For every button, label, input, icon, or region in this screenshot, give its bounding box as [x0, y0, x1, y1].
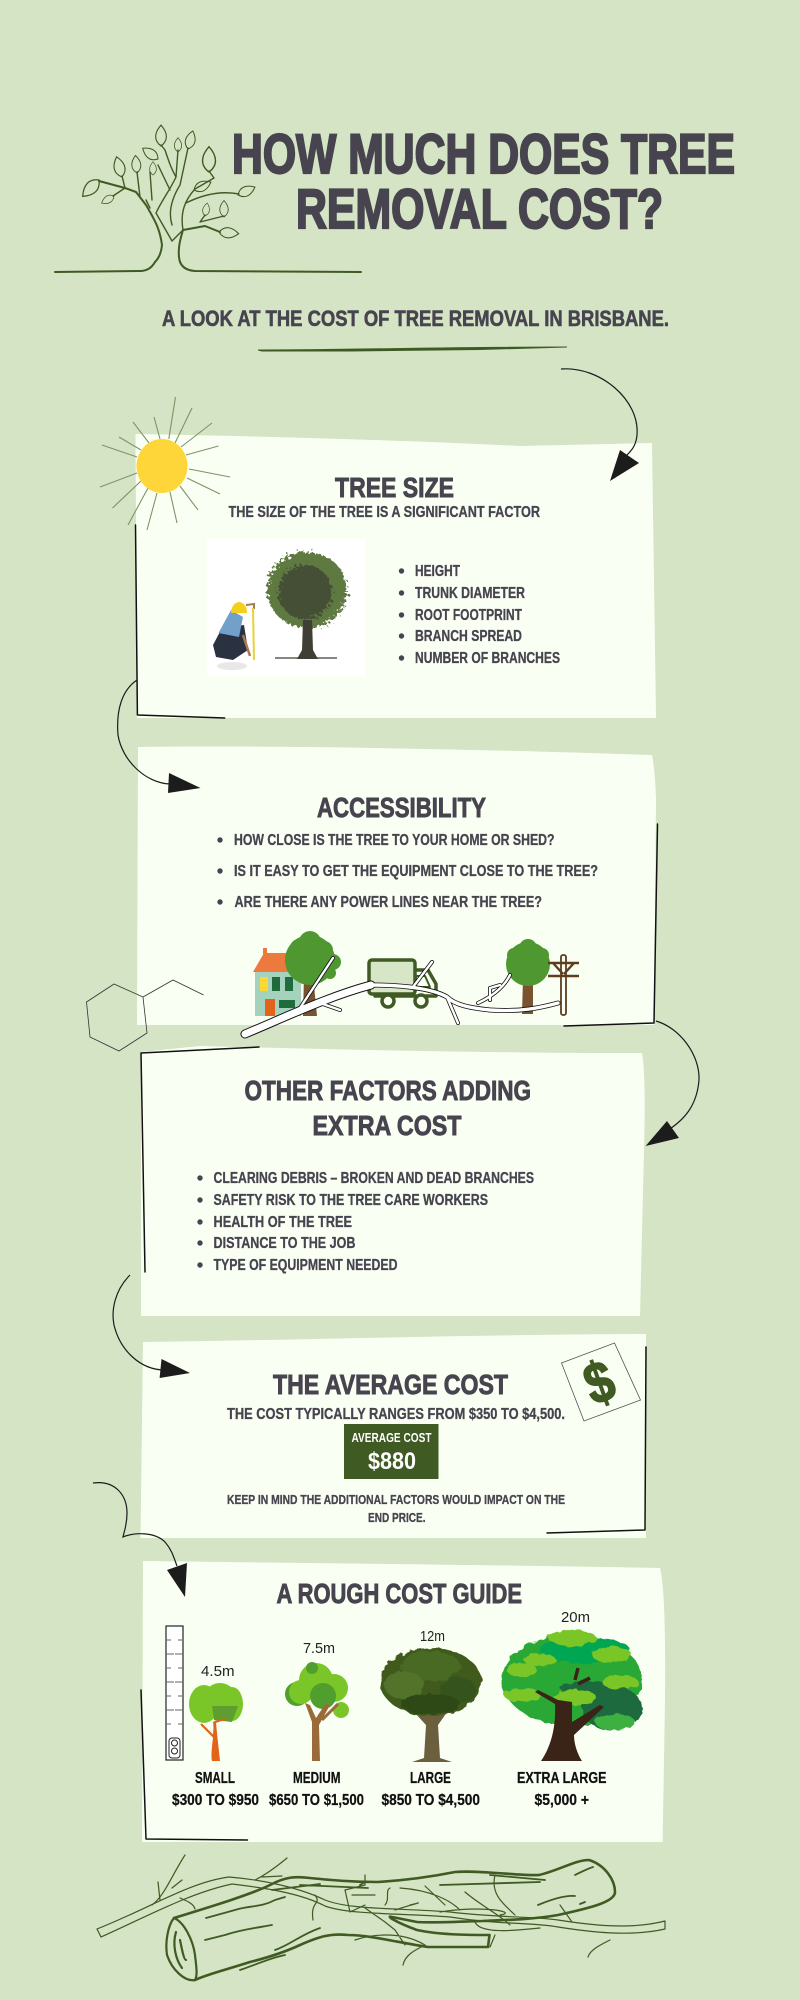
- panel background: [142, 1561, 665, 1842]
- icon: measuring ruler: [166, 1626, 183, 1760]
- average cost badge: AVERAGE COST: [352, 1431, 432, 1445]
- icon: molecule outline: [86, 980, 204, 1051]
- bullet list: ROOT FOOTPRINT: [415, 607, 522, 624]
- heading: other factors: OTHER FACTORS ADDING: [244, 1075, 531, 1106]
- size and price labels: $5,000 +: [534, 1792, 589, 1809]
- tree: medium: [285, 1662, 349, 1761]
- question list: IS IT EASY TO GET THE EQUIPMENT CLOSE TO THE TREE?: [234, 863, 598, 880]
- bullet list: NUMBER OF BRANCHES: [415, 650, 560, 667]
- height labels: 4.5m: [201, 1663, 234, 1680]
- bullet list: HEIGHT: [415, 563, 460, 580]
- panel background: [136, 434, 656, 718]
- arrow: title to tree size: [561, 369, 639, 481]
- icon: dollar tile: $: [575, 1348, 623, 1418]
- heading: tree size: TREE SIZE: [335, 472, 454, 503]
- cost range text: THE COST TYPICALLY RANGES FROM $350 TO $4,500.: [227, 1406, 565, 1423]
- panel background: [140, 1334, 646, 1538]
- question list: HOW CLOSE IS THE TREE TO YOUR HOME OR SHED?: [234, 832, 554, 849]
- arrow: tree size to accessibility: [118, 680, 200, 793]
- factors list: SAFETY RISK TO THE TREE CARE WORKERS: [214, 1192, 488, 1209]
- panel: accessibility: [137, 747, 656, 1034]
- size and price labels: MEDIUM: [293, 1770, 340, 1787]
- heading: average cost: THE AVERAGE COST: [273, 1369, 508, 1400]
- size and price labels: $300 TO $950: [172, 1792, 259, 1809]
- heading: rough cost guide: A ROUGH COST GUIDE: [276, 1578, 522, 1609]
- size and price labels: [172, 1770, 606, 1809]
- factors list: [197, 1170, 534, 1274]
- bullet list: TRUNK DIAMETER: [415, 585, 525, 602]
- tree: small: [189, 1683, 243, 1761]
- factors list: DISTANCE TO THE JOB: [214, 1235, 356, 1252]
- icon: dollar tile: [562, 1343, 640, 1421]
- illustration: fallen branches: [245, 958, 558, 1034]
- height labels: 12m: [420, 1628, 445, 1645]
- size and price labels: $850 TO $4,500: [382, 1792, 480, 1809]
- average cost badge: [344, 1424, 438, 1479]
- icon: truck: [369, 960, 436, 1007]
- intro text: THE SIZE OF THE TREE IS A SIGNIFICANT FACTOR: [228, 504, 540, 521]
- size and price labels: EXTRA LARGE: [517, 1770, 606, 1787]
- arrow: average cost to rough guide: [93, 1483, 187, 1597]
- size and price labels: LARGE: [410, 1770, 451, 1787]
- photo: worker measuring a tree: [207, 539, 366, 676]
- illustration: tree and power pole: [506, 939, 579, 1015]
- arrow: accessibility to other factors: [646, 1021, 699, 1146]
- size and price labels: SMALL: [195, 1770, 235, 1787]
- question list: [217, 832, 598, 911]
- panel background: [141, 1046, 645, 1316]
- note text: END PRICE.: [368, 1510, 426, 1525]
- height labels: 7.5m: [303, 1640, 335, 1657]
- heading: other factors: [244, 1075, 531, 1141]
- panel: average cost: [140, 1334, 646, 1538]
- panel background: [137, 747, 656, 1025]
- icon: sun: [100, 397, 230, 530]
- note text: KEEP IN MIND THE ADDITIONAL FACTORS WOULD IMPACT ON THE: [227, 1492, 565, 1507]
- factors list: HEALTH OF THE TREE: [214, 1214, 352, 1231]
- panel: tree size: [136, 434, 656, 718]
- subtitle: A LOOK AT THE COST OF TREE REMOVAL IN BRISBANE.: [162, 306, 669, 331]
- arrow: other factors to average cost: [113, 1275, 190, 1378]
- heading: accessibility: ACCESSIBILITY: [317, 792, 486, 823]
- heading: other factors: EXTRA COST: [312, 1110, 462, 1141]
- illustration: logs and branches: [97, 1855, 665, 1980]
- average cost badge: $880: [368, 1448, 416, 1475]
- bullet list: BRANCH SPREAD: [415, 628, 522, 645]
- question list: ARE THERE ANY POWER LINES NEAR THE TREE?: [234, 894, 542, 911]
- height labels: [201, 1609, 590, 1680]
- tree: extra large: [502, 1630, 642, 1761]
- icon: line-art tree: [55, 125, 361, 272]
- title: [232, 122, 735, 240]
- bullet list: [399, 563, 560, 667]
- tree: large: [380, 1648, 482, 1762]
- size and price labels: $650 TO $1,500: [269, 1792, 364, 1809]
- illustration: house and tree: [253, 931, 341, 1016]
- subtitle underline: [258, 347, 567, 351]
- title: REMOVAL COST?: [296, 177, 663, 240]
- height labels: 20m: [561, 1609, 590, 1626]
- panel: rough cost guide: [142, 1561, 665, 1842]
- black corner lines: [136, 525, 658, 1840]
- factors list: CLEARING DEBRIS – BROKEN AND DEAD BRANCHES: [214, 1170, 534, 1187]
- note text: [227, 1492, 565, 1525]
- factors list: TYPE OF EQUIPMENT NEEDED: [214, 1257, 398, 1274]
- panel: other factors: [141, 1046, 645, 1316]
